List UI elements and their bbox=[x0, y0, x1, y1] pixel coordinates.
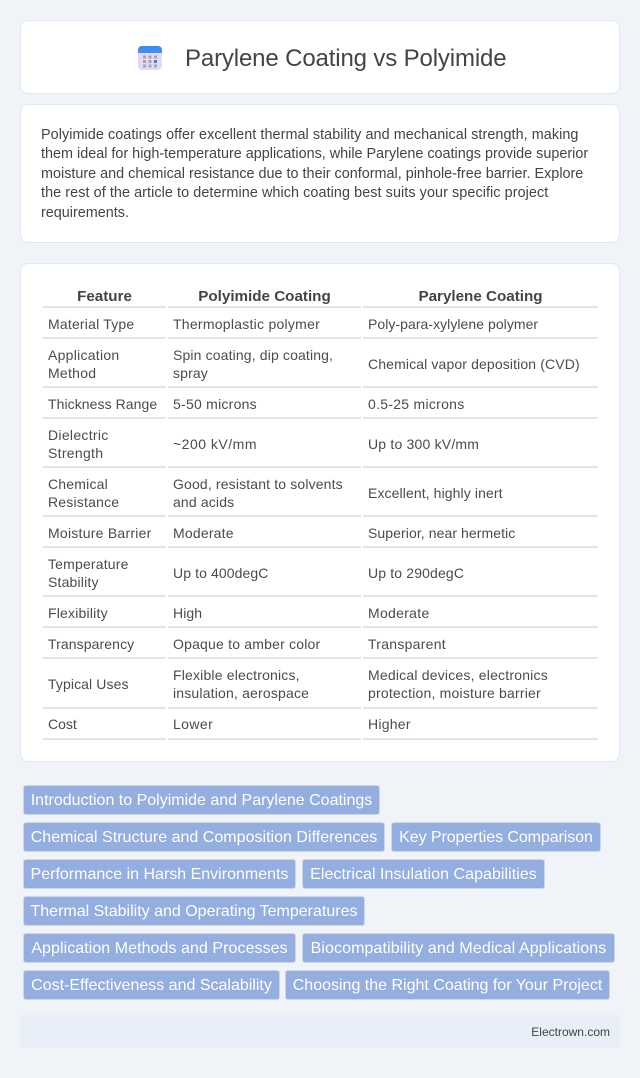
table rows: Cost bbox=[48, 716, 77, 732]
source credit: Electrown.com bbox=[531, 1025, 610, 1039]
table rows: Good, resistant to solvents bbox=[173, 476, 343, 492]
intro text: them ideal for high-temperature applications, while Parylene coatings provide superior bbox=[41, 146, 588, 162]
table rows: Stability bbox=[48, 574, 99, 590]
table rows: protection, moisture barrier bbox=[368, 685, 541, 701]
table rows bbox=[43, 306, 598, 740]
topic tags: Performance in Harsh Environments bbox=[31, 866, 288, 883]
table rows: High bbox=[173, 605, 202, 621]
table rows: Chemical bbox=[48, 476, 108, 492]
table rows: Application bbox=[48, 347, 119, 363]
topic tags: Choosing the Right Coating for Your Project bbox=[293, 977, 602, 994]
intro card bbox=[20, 104, 620, 243]
table rows: spray bbox=[173, 365, 208, 381]
table rows: Flexible electronics, bbox=[173, 667, 300, 683]
table rows: Up to 300 kV/mm bbox=[368, 436, 479, 452]
table rows: Typical Uses bbox=[48, 676, 129, 692]
topic tags bbox=[23, 785, 615, 1000]
table rows: Superior, near hermetic bbox=[368, 525, 515, 541]
table rows: ~200 kV/mm bbox=[173, 436, 257, 452]
topic tags: Thermal Stability and Operating Temperatures bbox=[30, 903, 357, 920]
table rows: Moderate bbox=[368, 605, 430, 621]
title: Parylene Coating vs Polyimide bbox=[185, 45, 506, 72]
table rows: Moisture Barrier bbox=[48, 525, 152, 541]
table rows: Up to 400degC bbox=[173, 565, 268, 581]
table rows: Spin coating, dip coating, bbox=[173, 347, 333, 363]
topic tags: Electrical Insulation Capabilities bbox=[310, 866, 537, 883]
table rows: 0.5-25 microns bbox=[368, 396, 465, 412]
table rows: Resistance bbox=[48, 494, 119, 510]
intro text: the rest of the article to determine which coating best suits your specific project bbox=[41, 185, 548, 201]
intro text: Polyimide coatings offer excellent thermal stability and mechanical strength, making bbox=[41, 126, 578, 142]
topic tags: Introduction to Polyimide and Parylene Coatings bbox=[31, 792, 372, 809]
table rows: Flexibility bbox=[48, 605, 108, 621]
topic tags: Key Properties Comparison bbox=[399, 829, 593, 846]
table rows: 5-50 microns bbox=[173, 396, 257, 412]
table rows: Method bbox=[48, 365, 96, 381]
header card bbox=[20, 20, 620, 94]
table rows: Material Type bbox=[48, 316, 134, 332]
table rows: Transparent bbox=[368, 636, 446, 652]
table rows: Higher bbox=[368, 716, 411, 732]
table rows: Up to 290degC bbox=[368, 565, 464, 581]
table header: Feature bbox=[77, 288, 132, 305]
table rows: Excellent, highly inert bbox=[368, 485, 503, 501]
topic tags: Chemical Structure and Composition Differences bbox=[31, 829, 377, 846]
table rows: Transparency bbox=[48, 636, 134, 652]
table header: Polyimide Coating bbox=[198, 288, 331, 305]
table rows: Dielectric bbox=[48, 427, 109, 443]
table rows: Temperature bbox=[48, 556, 129, 572]
table rows: Thermoplastic polymer bbox=[173, 316, 320, 332]
footer bbox=[20, 1015, 620, 1048]
icon: calendar bbox=[138, 46, 162, 70]
intro text: requirements. bbox=[41, 204, 129, 220]
topic tags: Biocompatibility and Medical Applications bbox=[311, 940, 606, 957]
comparison table card bbox=[20, 263, 620, 762]
table rows: Thickness Range bbox=[48, 396, 157, 412]
table header: Parylene Coating bbox=[418, 288, 543, 305]
table rows: Medical devices, electronics bbox=[368, 667, 548, 683]
intro text bbox=[41, 126, 588, 220]
table rows: Moderate bbox=[173, 525, 234, 541]
table rows: Chemical vapor deposition (CVD) bbox=[368, 356, 580, 372]
table rows: and acids bbox=[173, 494, 234, 510]
intro text: moisture and chemical resistance due to their conformal, pinhole-free barrier. Explore bbox=[41, 166, 583, 182]
topic tags: Application Methods and Processes bbox=[31, 940, 288, 957]
table rows: insulation, aerospace bbox=[173, 685, 309, 701]
table header bbox=[77, 288, 543, 305]
topic tags: Cost-Effectiveness and Scalability bbox=[31, 977, 272, 994]
table rows: Poly-para-xylylene polymer bbox=[368, 316, 538, 332]
table rows: Strength bbox=[48, 445, 103, 461]
table rows: Opaque to amber color bbox=[173, 636, 320, 652]
table rows: Lower bbox=[173, 716, 213, 732]
